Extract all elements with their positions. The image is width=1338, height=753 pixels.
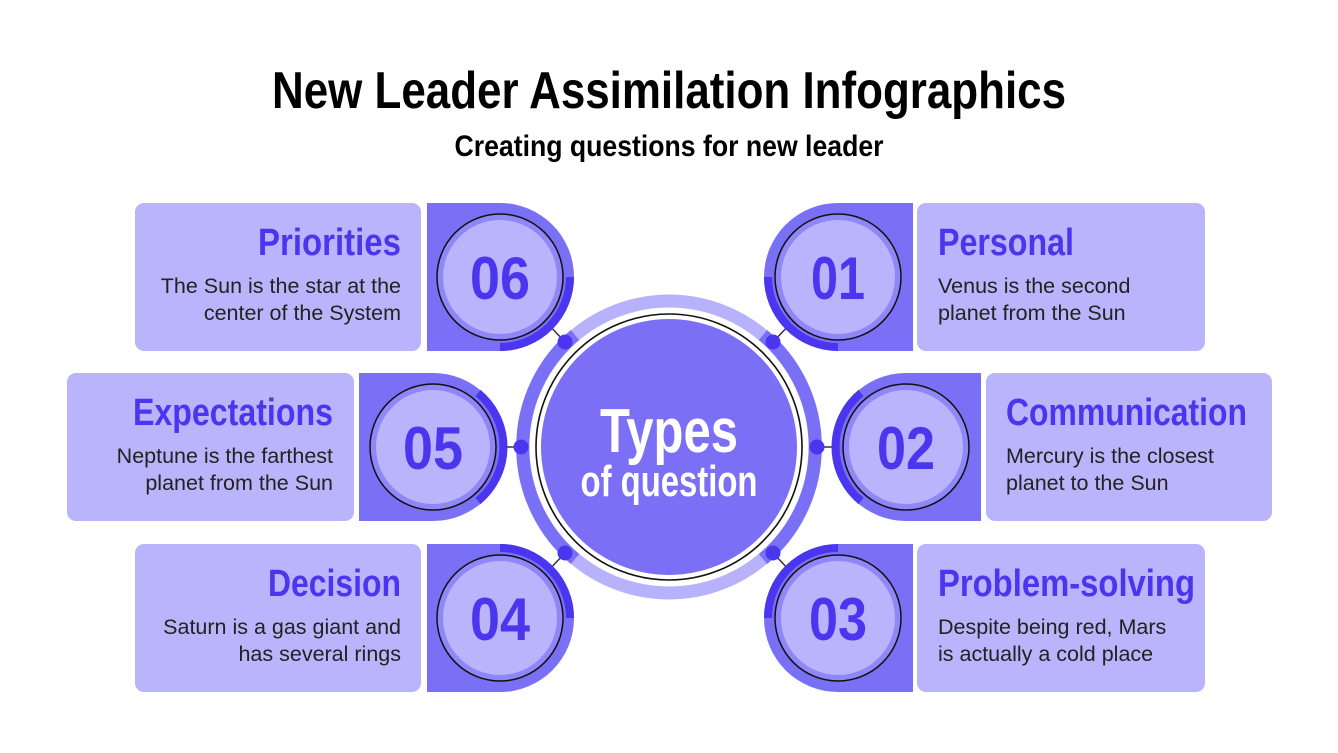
center circle: Types [600,397,738,466]
panel: 04 Decision: 04 [470,586,531,653]
panel: 03 Problem-solving [764,544,1205,692]
panel: 02 Communication: 02 [877,415,935,482]
panel: 02 Communication [832,373,1272,521]
connector dots [514,334,824,560]
panel: 01 Personal: planet from the Sun [938,301,1126,325]
panel: 04 Decision: Decision [268,563,401,605]
panel: 01 Personal [764,203,1205,351]
panel: 01 Personal: Personal [938,222,1074,264]
panel: 05 Expectations [67,373,507,521]
subtitle: Creating questions for new leader [454,130,884,163]
panel: 02 Communication: Mercury is the closest [1006,444,1214,468]
center circle [523,301,815,593]
panel: 02 Communication: Communication [1006,392,1247,434]
panel: 05 Expectations: planet from the Sun [145,471,333,495]
title: New Leader Assimilation Infographics [272,62,1066,120]
panel: 06 Priorities: Priorities [258,222,401,264]
panel: 03 Problem-solving: 03 [809,586,867,653]
panel: 06 Priorities: The Sun is the star at the [161,274,401,298]
panel: 01 Personal: 01 [811,245,865,312]
panel: 05 Expectations: 05 [403,415,463,482]
panel: 05 Expectations: Neptune is the farthest [117,444,333,468]
panel: 04 Decision [135,544,574,692]
center circle: of question [580,457,758,506]
panel: 02 Communication: planet to the Sun [1006,471,1169,495]
panel: 05 Expectations: Expectations [133,392,333,434]
panel: 06 Priorities: center of the System [204,301,401,325]
panel: 04 Decision: Saturn is a gas giant and [163,615,401,639]
panel: 01 Personal: Venus is the second [938,274,1130,298]
connectors [497,322,842,573]
panel: 06 Priorities: 06 [470,245,530,312]
panel: 06 Priorities [135,203,574,351]
panel: 03 Problem-solving: Problem-solving [938,563,1195,605]
panel: 04 Decision: has several rings [238,642,401,666]
panel: 03 Problem-solving: Despite being red, Mars [938,615,1166,639]
panel: 03 Problem-solving: is actually a cold place [938,642,1153,666]
